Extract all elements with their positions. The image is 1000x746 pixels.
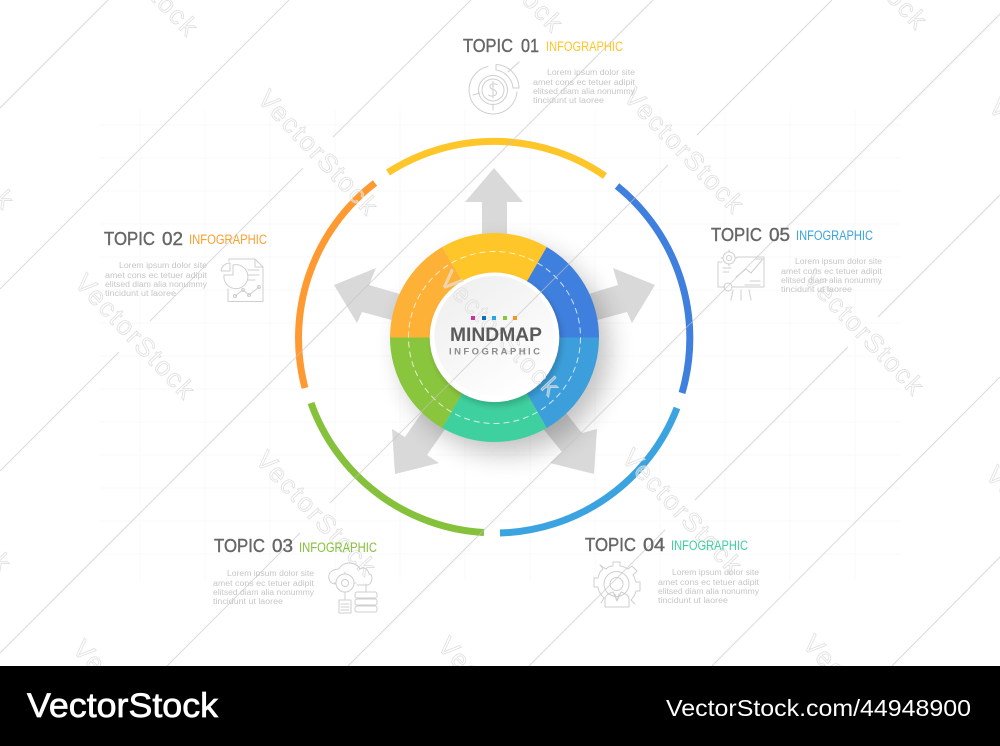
topic 05 [711, 224, 883, 300]
segment: teal [442, 393, 547, 442]
topic 01 [463, 35, 636, 114]
icon: dollar target [469, 62, 519, 114]
donut shadow [401, 246, 609, 454]
icon: cloud database [329, 563, 377, 613]
segment: green [390, 338, 462, 428]
body text: Lorem ipsum dolor site [795, 257, 882, 266]
body text: tincidunt ut laoree [105, 289, 176, 298]
body text: elitsed diam alia nonummy [105, 280, 207, 289]
dashed ring [408, 252, 580, 424]
heading: TOPIC [711, 224, 762, 245]
body text [105, 261, 208, 298]
heading: TOPIC [463, 35, 513, 56]
heading: 05 [769, 224, 790, 245]
outer ring [299, 141, 690, 533]
body text: tincidunt ut laoree [658, 596, 728, 605]
body text: elitsed diam alia nonummy [533, 87, 635, 96]
watermark: VectorStock [798, 264, 931, 401]
icon: gear person [594, 562, 640, 607]
body text: elitsed diam alia nonummy [213, 588, 314, 597]
body text: elitsed diam alia nonummy [781, 276, 882, 285]
watermark: VectorStock [250, 445, 383, 582]
body text: Lorem ipsum dolor site [672, 568, 759, 577]
body text: amet cons ec tetuer adipit [105, 271, 208, 280]
body text: tincidunt ut laoree [781, 285, 852, 294]
body text [213, 569, 315, 606]
heading: 01 [521, 35, 539, 56]
subheading: INFOGRAPHIC [299, 540, 377, 555]
heading: 04 [643, 534, 665, 555]
heading: TOPIC [585, 534, 636, 555]
donut [390, 233, 599, 442]
watermark: VectorStock [618, 82, 751, 219]
watermark: VectorStock [616, 443, 749, 580]
body text [658, 568, 760, 605]
body text: amet cons ec tetuer adipit [533, 78, 636, 87]
arrow: upper left [334, 268, 407, 323]
ring arc: topic 03 green [311, 403, 484, 532]
body text [781, 257, 883, 294]
segment: orange [390, 247, 462, 338]
watermark: VectorStock [434, 265, 567, 402]
icon: presentation board [718, 250, 764, 300]
heading: TOPIC [104, 228, 155, 249]
color dots [471, 316, 517, 320]
body text: Lorem ipsum dolor site [227, 569, 314, 578]
arrows [334, 168, 655, 474]
segment: light blue [526, 338, 599, 428]
topic 02 [104, 228, 267, 302]
center title: MINDMAP [450, 325, 542, 346]
footer bar [0, 666, 1000, 746]
topic 04 [585, 534, 760, 607]
body text [533, 68, 636, 105]
body text: tincidunt ut laoree [213, 597, 283, 606]
body text: amet cons ec tetuer adipit [781, 267, 883, 276]
arrow: up [465, 168, 523, 240]
subheading: INFOGRAPHIC [671, 538, 748, 553]
center label [449, 316, 542, 358]
center circle [430, 272, 562, 406]
segment: yellow [442, 233, 547, 282]
ring arc: topic 01 yellow [388, 141, 605, 176]
body text: Lorem ipsum dolor site [547, 68, 635, 77]
watermark: VectorStock [252, 84, 385, 221]
footer logo: VectorStock [27, 687, 219, 725]
body text: amet cons ec tetuer adipit [213, 579, 315, 588]
body text: Lorem ipsum dolor site [119, 261, 207, 270]
topic 03 [213, 535, 377, 613]
subheading: INFOGRAPHIC [546, 39, 623, 54]
segment: blue [526, 247, 599, 338]
heading: TOPIC [214, 535, 265, 556]
watermark: VectorStock [69, 268, 202, 405]
arrow: lower left [392, 408, 448, 474]
icon: report [221, 259, 263, 302]
heading: 03 [272, 535, 293, 556]
arrow: upper right [582, 268, 655, 323]
center subtitle: INFOGRAPHIC [449, 346, 540, 358]
ring arc: topic 05 blue [617, 186, 690, 393]
subheading: INFOGRAPHIC [189, 232, 267, 247]
ring arc: topic 02 orange [299, 183, 375, 388]
body text: amet cons ec tetuer adipit [658, 578, 760, 587]
footer url: VectorStock.com/44948900 [666, 695, 971, 721]
arrow: lower right [540, 408, 597, 474]
heading: 02 [162, 228, 183, 249]
ring arc: topic 04 light blue [500, 408, 677, 533]
body text: elitsed diam alia nonummy [658, 587, 759, 596]
subheading: INFOGRAPHIC [796, 228, 873, 243]
body text: tincidunt ut laoree [533, 96, 604, 105]
